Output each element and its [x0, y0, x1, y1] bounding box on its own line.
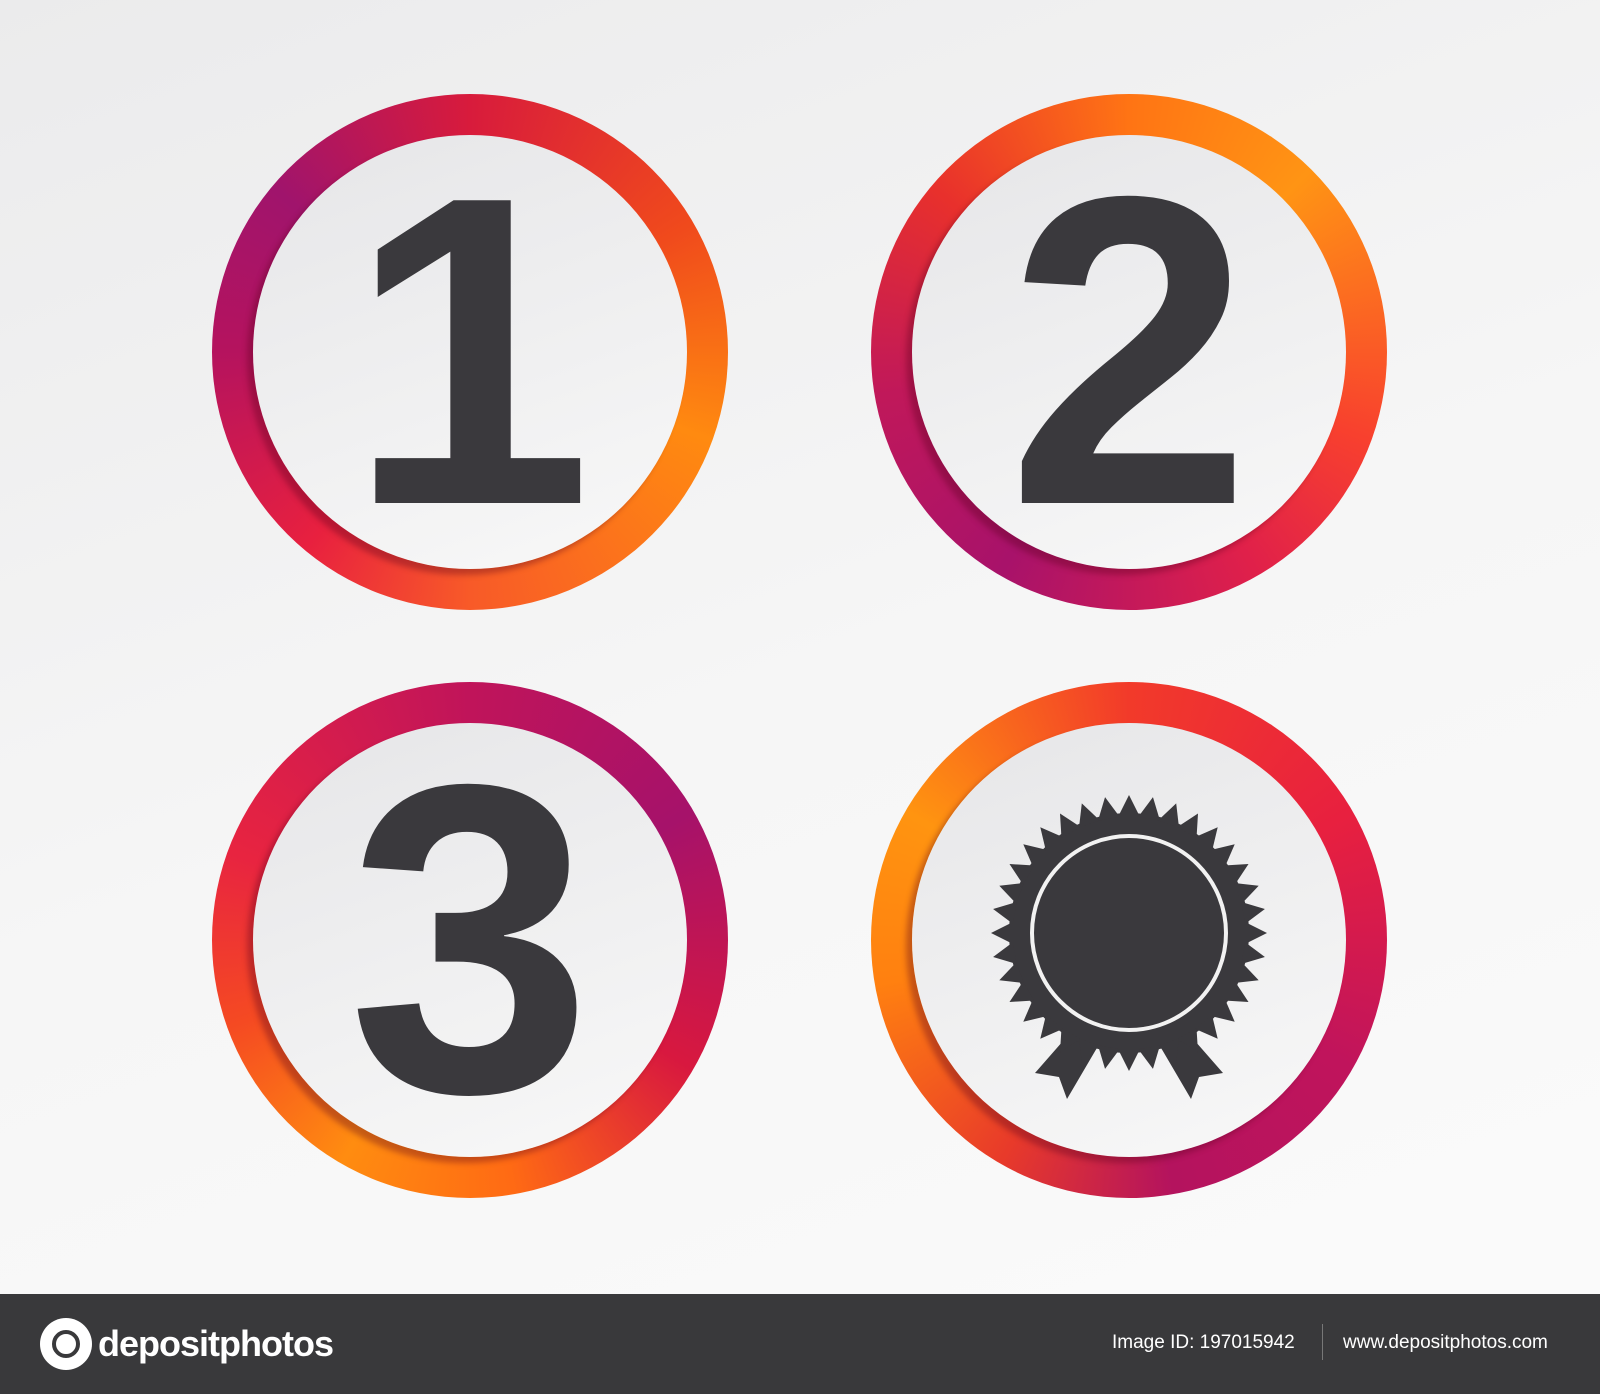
icon: award badge	[991, 795, 1267, 1099]
circle 3	[212, 682, 728, 1198]
image id: Image ID: 197015942	[1112, 1332, 1295, 1353]
digit 1: 1	[348, 106, 592, 597]
digit 2: 2	[1007, 106, 1251, 597]
digit 3: 3	[348, 694, 592, 1185]
circle 2	[871, 94, 1387, 610]
circle 4: award badge	[871, 682, 1387, 1198]
logo	[40, 1318, 333, 1370]
circle 1	[212, 94, 728, 610]
logo: depositphotos	[98, 1323, 333, 1364]
footer bar	[0, 1294, 1600, 1394]
website: www.depositphotos.com	[1343, 1332, 1548, 1353]
